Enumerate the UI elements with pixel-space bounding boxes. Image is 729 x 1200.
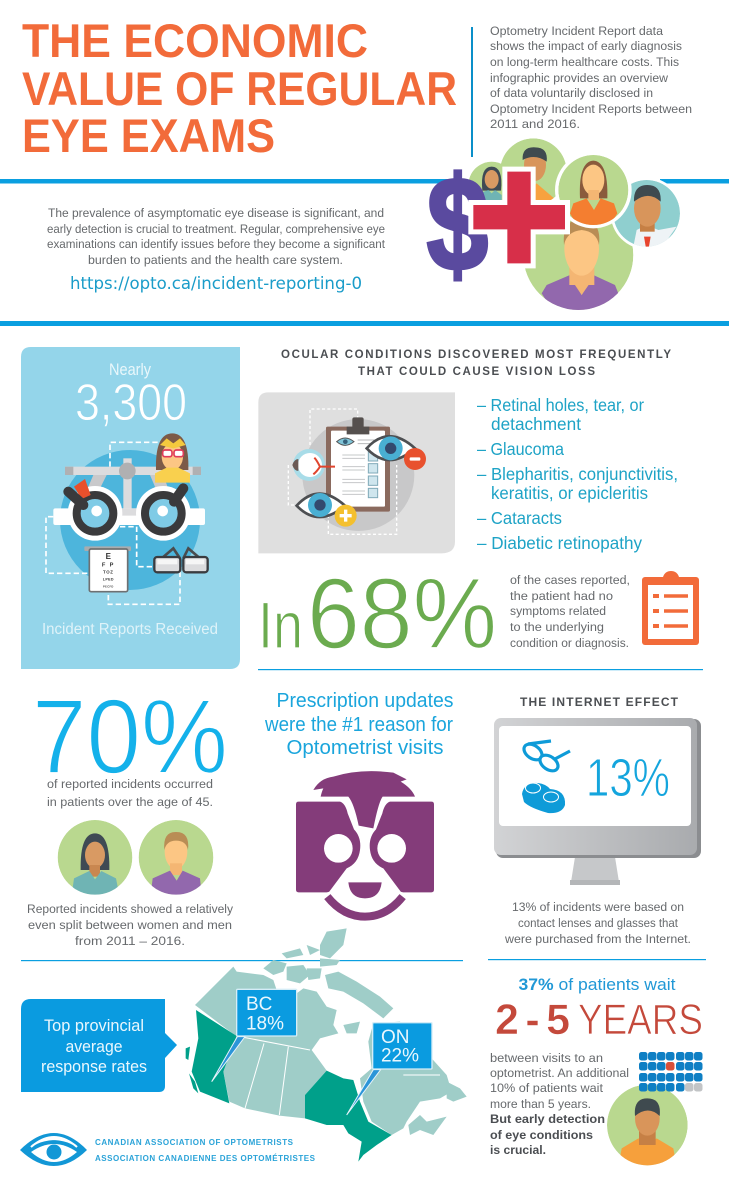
text: split between women and men: from 2011 – 2016.: [75, 934, 185, 948]
logo: Canadian Association of Optometrists: [20, 1133, 316, 1166]
heading: prescription updates: [264, 689, 454, 759]
prevalence text block: burden to patients and the health care system.: [88, 253, 343, 267]
panel: incident reports: [21, 347, 240, 669]
text: cases with no symptoms: to the underlying: [510, 620, 604, 634]
callout: BC 18 percent: BC: [246, 994, 272, 1015]
icon: eye chart: [84, 546, 131, 592]
person: woman: [58, 820, 132, 895]
icon: dollar sign: $: [427, 150, 488, 299]
text: split between women and men: [27, 902, 234, 948]
list: ocular conditions: – Retinal holes, tear, or: [477, 395, 644, 415]
title: THE ECONOMIC: [22, 14, 368, 67]
icon: eye chart: LPED: [103, 577, 114, 581]
text: early detection: [490, 1051, 629, 1157]
icon: purple face with glasses: [296, 771, 434, 917]
callout: BC 18 percent: 18%: [246, 1013, 284, 1034]
intro text block: infographic provides an overview: [490, 71, 668, 85]
text: early detection: optometrist. An additional: [490, 1066, 629, 1080]
statistic: in 68 percent: In: [258, 588, 303, 662]
text: early detection: 10% of patients wait: [490, 1081, 604, 1095]
callout: top provincial response rates: [21, 999, 177, 1092]
person: woman with glasses: [155, 433, 190, 483]
person: man in orange: [607, 1085, 688, 1167]
prevalence text block: The prevalence of asymptomatic eye disease is significant, and: [48, 206, 384, 220]
illustration: phoropter and eye chart: [46, 433, 208, 604]
prevalence text block: early detection is crucial to treatment. Regular, comprehensive eye: [47, 222, 385, 236]
heading: prescription updates: Optometrist visits: [286, 736, 444, 759]
text: split between women and men: Reported incidents showed a relatively: [27, 902, 234, 916]
text: internet purchases: 13% of incidents were based on: [512, 900, 684, 914]
map: light regions: [195, 928, 467, 1135]
icon: clipboard: [326, 417, 390, 512]
statistic: 2-5 years: [495, 996, 703, 1044]
icon: contact lens case: [522, 783, 565, 813]
callout: top provincial response rates: average: [66, 1037, 122, 1056]
title: EYE EXAMS: [22, 109, 275, 162]
callout: BC 18 percent: [212, 989, 297, 1082]
text: early detection: But early detection: [490, 1112, 605, 1126]
callout: ON 22 percent: 22%: [381, 1046, 419, 1067]
text: patients over 45: of reported incidents occurred: [47, 777, 213, 791]
text: internet purchases: were purchased from the Internet.: [504, 932, 691, 946]
text: 37 percent of patients wait: 37% of patients wait: [518, 976, 676, 994]
person: purple shirt man: [525, 220, 634, 310]
statistic: 2-5 years: 2-5: [495, 996, 570, 1044]
icon: eye chart: TOZ: [103, 570, 114, 575]
list: ocular conditions: – Diabetic retinopathy: [477, 533, 642, 553]
text: cases with no symptoms: of the cases reported,: [510, 573, 630, 587]
text: early detection: is crucial.: [490, 1143, 546, 1157]
big number: 3,300: 3,300: [75, 374, 187, 432]
person: orange blouse woman: [555, 152, 632, 228]
callout: ON 22 percent: [347, 1023, 432, 1115]
icon: glasses: [154, 548, 208, 572]
intro text block: Optometry Incident Report data: [490, 24, 663, 38]
illustration: people, dollar sign and cross: [427, 138, 683, 312]
icon: eye cross-section: [292, 449, 335, 481]
icon: eye logo: [20, 1133, 87, 1166]
callout: top provincial response rates: response rates: [41, 1057, 147, 1076]
text: internet purchases: [504, 900, 691, 946]
heading: the internet effect: THE INTERNET EFFECT: [520, 695, 679, 709]
divider lines: [21, 669, 706, 961]
chart: patient dot grid: [639, 1052, 702, 1092]
person: small woman: [469, 162, 502, 200]
icon: eye chart: PECFD: [103, 585, 114, 589]
statistic: 70 percent: 70%: [32, 678, 228, 796]
icon: eye chart: F P: [102, 562, 115, 568]
link: https://opto.ca/incident-reporting-0: [70, 274, 362, 294]
label: incident reports received: Incident Reports Received: [42, 621, 218, 638]
heading: prescription updates: Prescription updates: [276, 689, 454, 712]
callout: ON 22 percent: ON: [381, 1027, 409, 1048]
intro text block: Optometry Incident Reports between: [490, 102, 692, 116]
intro text block: of data voluntarily disclosed in: [490, 86, 653, 100]
heading: ocular conditions: [281, 349, 671, 378]
person: orange shirt man: [501, 138, 566, 200]
list: ocular conditions: keratitis, or epicleritis: [491, 483, 648, 503]
text: cases with no symptoms: condition or diagnosis.: [510, 636, 629, 650]
statistic: in 68 percent: 68%: [307, 558, 497, 670]
intro text block: 2011 and 2016.: [490, 117, 580, 131]
title: VALUE OF REGULAR: [22, 62, 457, 115]
text: internet purchases: contact lenses and glasses that: [518, 916, 679, 930]
text: patients over 45: [47, 777, 213, 809]
intro text block: on long-term healthcare costs. This: [490, 55, 679, 69]
statistic: 13 percent: 13%: [586, 748, 670, 808]
list: ocular conditions: – Glaucoma: [477, 439, 564, 459]
icon: eye with plus: [297, 493, 357, 527]
text: cases with no symptoms: [510, 573, 630, 650]
list: ocular conditions: [477, 395, 678, 553]
prevalence text block: [47, 206, 386, 267]
logo: Canadian Association of Optometrists: CANADIAN ASSOCIATION OF OPTOMETRISTS: [95, 1138, 294, 1147]
text: early detection: more than 5 years.: [490, 1097, 591, 1111]
map: Canada with provincial rates: [186, 928, 467, 1162]
prevalence text block: examinations can identify issues before they become a significant: [47, 237, 386, 251]
label: nearly: Nearly: [109, 360, 151, 379]
list: ocular conditions: – Blepharitis, conjunctivitis,: [477, 464, 678, 484]
text: early detection: between visits to an: [490, 1051, 603, 1065]
icon: glasses: [521, 741, 570, 774]
text: early detection: of eye conditions: [490, 1128, 593, 1142]
icon: eye with minus: [367, 436, 426, 470]
heading: ocular conditions: THAT COULD CAUSE VISION LOSS: [358, 366, 595, 378]
text: split between women and men: even split between women and men: [28, 918, 232, 932]
text: cases with no symptoms: the patient had no: [510, 589, 613, 603]
person: man: [139, 820, 213, 895]
heading: ocular conditions: OCULAR CONDITIONS DISCOVERED MOST FREQUENTLY: [281, 349, 671, 361]
header divider bars: [0, 179, 729, 326]
heading: prescription updates: were the #1 reason for: [264, 713, 453, 736]
illustration: computer monitor: [494, 718, 701, 885]
intro text block: [471, 24, 692, 157]
logo: Canadian Association of Optometrists: ASSOCIATION CANADIENNE DES OPTOMÉTRISTES: [95, 1154, 316, 1163]
statistic: 2-5 years: YEARS: [578, 996, 703, 1044]
list: ocular conditions: – Cataracts: [477, 508, 562, 528]
title: [22, 14, 457, 162]
callout: top provincial response rates: Top provincial: [44, 1016, 144, 1035]
icon: red cross: [468, 167, 570, 268]
list: ocular conditions: detachment: [491, 414, 581, 434]
text: cases with no symptoms: symptoms related: [510, 604, 606, 618]
icon: orange clipboard: [642, 571, 699, 645]
panel: clipboard illustration: [258, 392, 455, 553]
intro text block: shows the impact of early diagnosis: [490, 39, 682, 53]
people: woman and man: [58, 820, 213, 895]
text: patients over 45: in patients over the age of 45.: [47, 795, 213, 809]
map: highlighted provinces: [186, 1010, 392, 1162]
person: doctor: [612, 180, 680, 247]
icon: eye chart: E: [106, 552, 112, 561]
